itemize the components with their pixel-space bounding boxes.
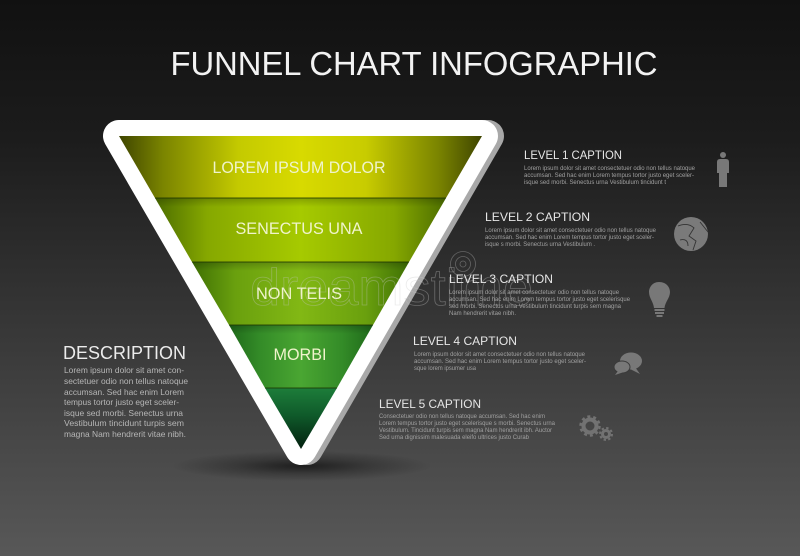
level 5 band xyxy=(265,388,337,449)
level 2 caption: Lorem ipsum dolor sit amet consectetuer odio non tellus natoque xyxy=(485,227,656,234)
level 1 band xyxy=(119,136,482,198)
description text: sectetuer odio non tellus natoque xyxy=(64,377,189,386)
level 4 label: MORBI xyxy=(274,346,326,364)
description text: isque sed morbi. Senectus urna xyxy=(64,409,184,418)
level 2 caption: isque s morbi. Senectus urna Vestibulum . xyxy=(485,241,595,248)
level 4 band xyxy=(229,325,373,388)
level 3 caption: Nam hendrerit vitae nibh. xyxy=(449,310,516,317)
funnel chart xyxy=(119,136,488,449)
level 3 caption: sed morbi. Senectus urna Vestibulum tincidunt turpis sem magna xyxy=(449,303,621,310)
level 5 caption: Lorem tempus tortor justo eget scelerisque s morbi. Senectus urna xyxy=(379,420,555,427)
description xyxy=(63,342,189,439)
level 4 caption: LEVEL 4 CAPTION xyxy=(413,334,517,348)
level 2 caption: LEVEL 2 CAPTION xyxy=(485,210,590,224)
description text: accumsan. Sed hac enim Lorem xyxy=(64,388,184,397)
funnel shadow xyxy=(172,451,432,481)
level 3 label: NON TELIS xyxy=(256,285,342,303)
description text: Lorem ipsum dolor sit amet con- xyxy=(64,366,184,375)
level 4 caption xyxy=(413,334,586,372)
funnel grey edge xyxy=(125,136,488,449)
icon: gears xyxy=(580,416,612,440)
level 2 band xyxy=(155,198,446,262)
level 3 caption xyxy=(449,272,630,317)
level 3 caption: LEVEL 3 CAPTION xyxy=(449,272,553,286)
level 3 band xyxy=(192,262,409,325)
icon: person xyxy=(717,152,729,187)
description text: Vestibulum tincidunt turpis sem xyxy=(64,419,184,428)
level 1 caption: LEVEL 1 CAPTION xyxy=(524,148,622,162)
level 2 caption xyxy=(485,210,656,248)
title: FUNNEL CHART INFOGRAPHIC xyxy=(170,46,658,83)
level 2 caption: accumsan. Sed hac enim Lorem tempus tortor justo eget sceler- xyxy=(485,234,654,241)
funnel white frame xyxy=(119,136,482,449)
level 5 caption: LEVEL 5 CAPTION xyxy=(379,397,481,411)
level 1 caption: isque sed morbi. Senectus urna Vestibulum tincidunt t xyxy=(524,179,666,186)
level 1 caption xyxy=(524,148,695,186)
level 5 caption: Sed urna dignissim malesuada eleifo ultrices justo Curab xyxy=(379,434,529,441)
level 1 label: LOREM IPSUM DOLOR xyxy=(212,159,386,177)
level 4 caption: accumsan. Sed hac enim Lorem tempus tortor justo eget sceler- xyxy=(414,358,586,365)
description text xyxy=(64,366,189,439)
level 2 label: SENECTUS UNA xyxy=(236,220,362,238)
level 3 caption: accumsan. Sed hac enim Lorem tempus tortor justo eget scelerisque xyxy=(449,296,630,303)
level 5 caption: Consectetuer odio non tellus natoque accumsan. Sed hac enim xyxy=(379,413,545,420)
description heading: DESCRIPTION xyxy=(63,342,186,363)
icon: light bulb xyxy=(649,282,670,317)
level 4 caption: Lorem ipsum dolor sit amet consectetuer odio non tellus natoque xyxy=(414,351,585,358)
level 3 caption: Lorem ipsum dolor sit amet consectetuer odio non tellus natoque xyxy=(449,289,619,296)
level 1 caption: Lorem ipsum dolor sit amet consectetuer odio non tellus natoque xyxy=(524,165,695,172)
level 5 caption: Vestibulum. Tincidunt turpis sem magna Nam hendrerit ibh. Auctor xyxy=(379,427,553,434)
level 5 caption xyxy=(379,397,555,441)
watermark: dreamstime xyxy=(250,259,533,317)
icon: speech bubbles xyxy=(614,352,642,375)
level 4 caption: sque lorem ipsumer usa xyxy=(414,365,476,372)
icon: globe xyxy=(674,217,708,251)
level 1 caption: accumsan. Sed hac enim Lorem tempus tortor justo eget sceler- xyxy=(524,172,694,179)
description text: tempus tortor justo eget sceler- xyxy=(64,398,179,407)
description text: magna Nam hendrerit vitae nibh. xyxy=(64,430,186,439)
